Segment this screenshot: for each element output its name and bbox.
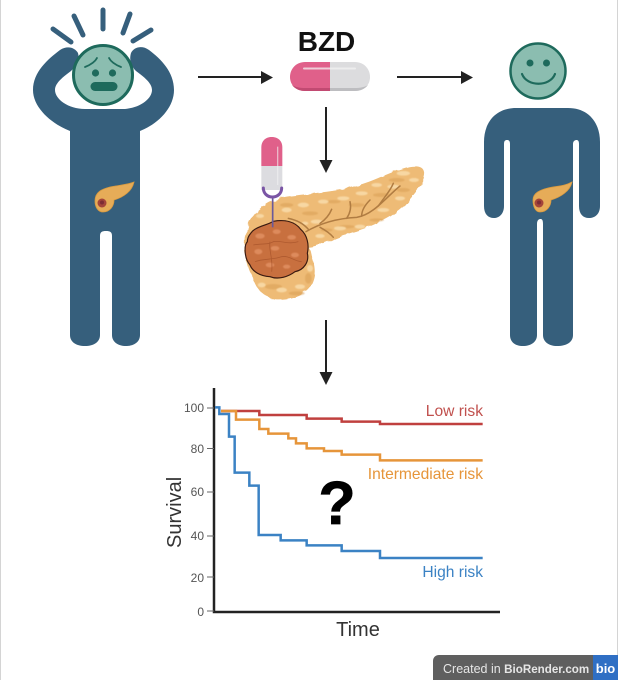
survival chart [164, 388, 500, 641]
y axis tick labels: 40 [191, 529, 204, 543]
BioRender badge: bio [596, 661, 615, 676]
label: low risk: Low risk [426, 403, 483, 420]
intermediate risk curve [221, 411, 483, 460]
high risk curve [215, 407, 483, 558]
y axis tick labels: 80 [191, 442, 204, 456]
arrow: BZD to pancreas [320, 107, 332, 173]
icon: BZD capsule [290, 62, 370, 91]
stress lines [53, 10, 151, 42]
y axis tick labels [184, 401, 204, 619]
small pancreas [533, 182, 572, 212]
small pancreas [95, 182, 134, 212]
y axis tick labels: 20 [191, 571, 204, 585]
pancreatic duct [288, 183, 400, 237]
y axis tick labels: 100 [184, 401, 204, 415]
heading: BZD: BZD [298, 26, 355, 57]
smiling head [510, 44, 566, 98]
figure: recovered patient [484, 44, 600, 346]
y axis tick labels: 60 [191, 485, 204, 499]
y axis title: Survival [164, 477, 186, 548]
low risk curve [221, 411, 483, 424]
body [484, 108, 600, 346]
pancreas [245, 166, 425, 299]
arrow: patient to BZD [198, 71, 273, 84]
question mark: ? [318, 469, 356, 537]
arrow: BZD to recovered patient [397, 71, 473, 84]
tumour [245, 221, 308, 278]
y axis tick labels: 0 [197, 605, 204, 619]
drug probe: capsule [261, 137, 282, 197]
BioRender badge: Created in BioRender.com [443, 662, 589, 676]
illustration: pancreas with tumour and targeted drug [245, 137, 425, 299]
worried head [74, 46, 132, 104]
label: intermediate risk: Intermediate risk [368, 466, 483, 483]
body with arms raised [33, 47, 174, 346]
label: high risk: High risk [422, 564, 483, 581]
figure: distressed patient [33, 10, 174, 346]
arrow: pancreas to survival chart [320, 320, 332, 385]
BioRender badge [433, 655, 618, 680]
drug probe: stem [270, 197, 275, 227]
axes [207, 388, 500, 612]
x axis title: Time [336, 619, 380, 641]
